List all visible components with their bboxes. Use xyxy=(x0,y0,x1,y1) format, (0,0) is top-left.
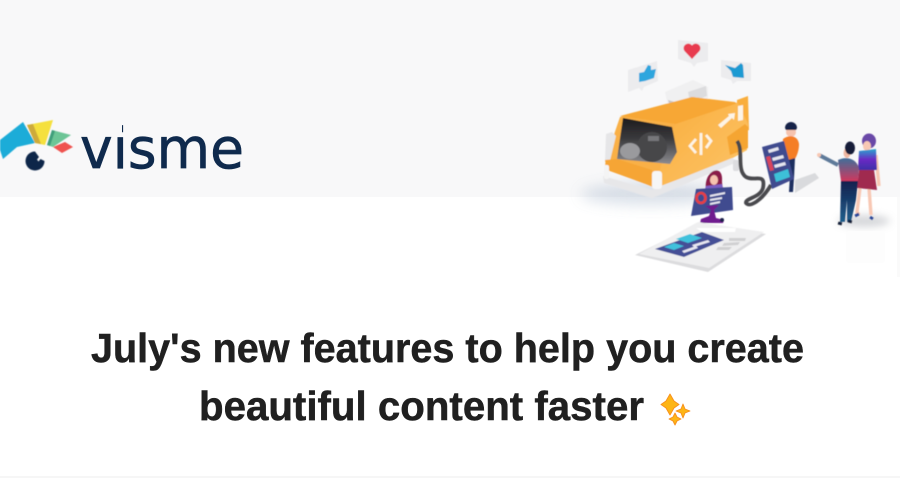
logo gauge mark xyxy=(0,120,73,170)
man arm xyxy=(819,155,838,165)
woman skirt xyxy=(857,170,877,190)
carrier face xyxy=(786,127,796,137)
title line 2: beautiful content faster xyxy=(199,383,644,429)
truck right fin xyxy=(737,96,749,134)
truck exit symbol xyxy=(738,105,743,121)
monitor stand and legs xyxy=(700,205,724,223)
bottom divider strip xyxy=(0,476,900,478)
couple ground shadow xyxy=(838,215,890,227)
woman face xyxy=(863,141,871,151)
woman face xyxy=(710,175,718,185)
woman body xyxy=(704,184,724,192)
carrier shirt xyxy=(782,136,799,165)
carrier hair xyxy=(785,122,797,130)
couple xyxy=(817,134,890,227)
logo: visme xyxy=(0,117,244,182)
truck side panel xyxy=(655,103,748,188)
right edge strip xyxy=(897,197,900,277)
truck door glass xyxy=(605,132,616,165)
truck top panel xyxy=(620,97,738,124)
carrier legs xyxy=(788,158,795,192)
cable xyxy=(737,141,771,204)
speech bubble: like left xyxy=(628,61,658,92)
wordmark dotless i cover xyxy=(110,122,122,135)
carrier board xyxy=(762,141,794,189)
document blue panel xyxy=(655,232,724,257)
truck socket box xyxy=(727,124,748,155)
woman arms and legs xyxy=(857,155,879,215)
faint ghost box xyxy=(846,231,885,263)
title xyxy=(91,325,804,429)
truck front lower panel xyxy=(605,159,652,186)
logo wordmark: visme xyxy=(80,117,244,182)
icon: sparkles xyxy=(661,394,690,425)
man legs xyxy=(840,181,858,222)
truck body xyxy=(605,97,748,188)
woman hair xyxy=(706,170,723,190)
woman shoes xyxy=(855,214,873,219)
carrier shadow xyxy=(795,173,819,193)
truck front window xyxy=(617,118,677,164)
arrow symbol on truck xyxy=(718,113,735,128)
code symbol on truck xyxy=(690,133,711,155)
truck bumper xyxy=(603,158,736,198)
truck roof vent xyxy=(665,80,708,108)
speech bubble: heart xyxy=(678,40,708,67)
woman hair xyxy=(862,134,876,148)
monitor xyxy=(691,187,733,216)
man shirt xyxy=(838,158,859,182)
person with board xyxy=(762,122,819,193)
header band xyxy=(0,0,900,197)
floor document xyxy=(635,222,766,272)
document lines xyxy=(729,238,746,241)
woman with monitor xyxy=(691,170,733,223)
man shoes xyxy=(838,221,852,224)
truck ground shadow xyxy=(580,183,720,205)
monitor circle xyxy=(696,193,706,203)
woman dress xyxy=(858,149,877,170)
man hair xyxy=(845,142,855,154)
speech bubble: like right xyxy=(721,60,751,84)
title line 1: July's new features to help you create xyxy=(91,325,804,371)
man face xyxy=(844,148,850,158)
illustration: delivery truck and team xyxy=(580,40,890,272)
truck wheel post xyxy=(733,160,739,171)
